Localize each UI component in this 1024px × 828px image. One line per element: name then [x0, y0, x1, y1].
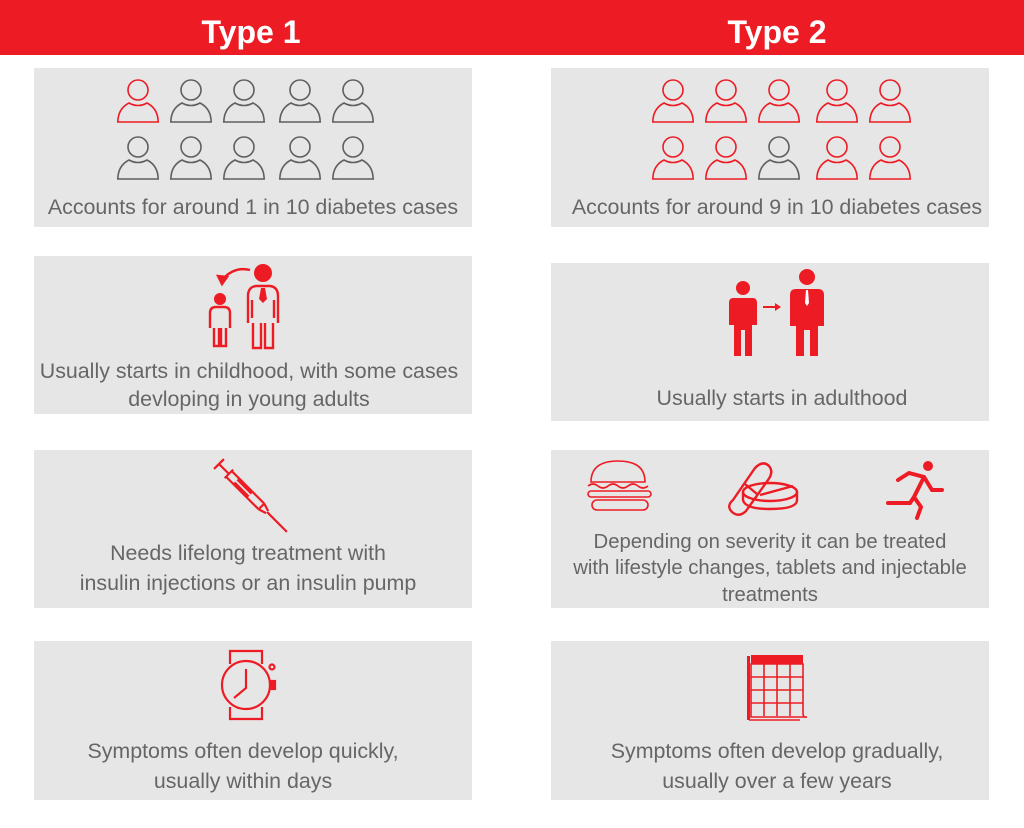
header bar — [0, 0, 1024, 55]
icon: watch — [222, 651, 275, 719]
panel: type 2 treatment: treatments — [722, 584, 818, 606]
panel: type 2 symptoms — [551, 641, 989, 800]
icon: syringe — [214, 459, 292, 537]
panel: type 1 symptoms — [34, 641, 472, 800]
icon: runner — [888, 461, 942, 518]
panel: type 2 treatment — [551, 450, 989, 608]
text: Usually starts in adulthood — [657, 386, 907, 410]
panel: type 1 prevalence — [34, 68, 472, 227]
panel: type 2 treatment: with lifestyle changes, tablets and injectable — [572, 557, 967, 579]
icon: calendar — [747, 655, 807, 720]
icon: burger — [588, 461, 651, 510]
panel: type 2 onset — [551, 263, 989, 421]
text: Symptoms often develop gradually, — [611, 739, 943, 763]
icon: people grid 9 in 10 — [653, 80, 910, 179]
panel: type 2 prevalence — [551, 68, 989, 227]
icon: pills — [729, 463, 797, 515]
panel: type 1 treatment — [34, 450, 472, 608]
icon: people grid 1 in 10 — [118, 80, 373, 179]
icon: young to adult — [729, 269, 824, 356]
text: Usually starts in childhood, with some cases — [40, 359, 458, 383]
panel: type 1 treatment: insulin injections or an insulin pump — [80, 571, 416, 595]
panel: type 2 symptoms: usually over a few years — [662, 769, 892, 793]
panel: type 1 onset — [34, 256, 472, 414]
text: Needs lifelong treatment with — [110, 541, 386, 565]
text: Symptoms often develop quickly, — [87, 739, 399, 763]
panel: type 1 onset: devloping in young adults — [128, 387, 370, 411]
panel: type 1 symptoms: usually within days — [154, 769, 332, 793]
icon: adult to child — [210, 264, 278, 348]
title: Type 1: Type 1 — [202, 14, 300, 50]
text: Accounts for around 9 in 10 diabetes cases — [572, 195, 982, 219]
text: Depending on severity it can be treated — [594, 531, 946, 553]
text: Accounts for around 1 in 10 diabetes cases — [48, 195, 458, 219]
title: Type 2: Type 2 — [728, 14, 826, 50]
